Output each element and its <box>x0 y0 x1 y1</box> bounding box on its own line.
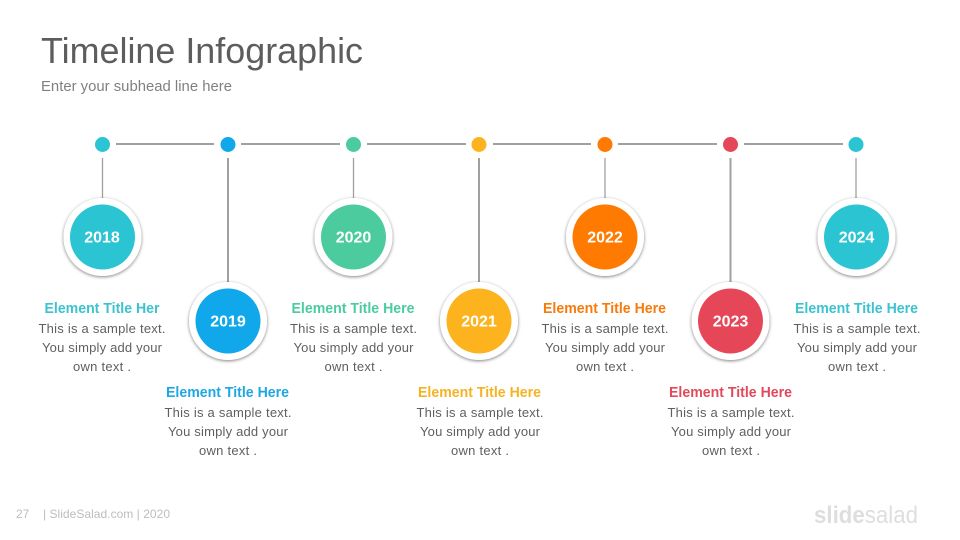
milestone 2021: This is a sample text. <box>416 405 544 420</box>
milestone 2022: You simply add your <box>545 340 666 355</box>
milestone 2023: 2023 <box>713 314 748 330</box>
milestone 2022: 2022 <box>587 230 623 246</box>
milestone 2019: 2019 <box>210 314 246 330</box>
milestone 2020: own text . <box>324 359 382 374</box>
milestone 2024 <box>794 137 920 374</box>
milestone 2020: 2020 <box>336 230 371 246</box>
milestone 2021: Element Title Here <box>418 384 541 401</box>
milestone 2018: This is a sample text. <box>38 321 166 336</box>
milestone 2022: This is a sample text. <box>542 321 668 336</box>
milestone 2024: You simply add your <box>797 340 918 355</box>
milestone 2024: Element Title Here <box>795 300 918 317</box>
milestone 2021 <box>416 137 544 458</box>
milestone 2022: own text . <box>576 359 634 374</box>
milestone 2019 <box>164 137 292 458</box>
footer page number: 27 <box>16 507 30 521</box>
timeline connector lines <box>116 143 843 145</box>
milestone 2021: You simply add your <box>420 424 541 439</box>
milestone 2019: Element Title Here <box>166 384 289 401</box>
milestone 2024: 2024 <box>839 230 874 246</box>
milestone 2020 <box>290 137 417 374</box>
milestone 2020: This is a sample text. <box>290 321 417 336</box>
milestone 2021: own text . <box>451 443 509 458</box>
milestone 2023: This is a sample text. <box>668 405 794 420</box>
milestone 2022 <box>542 137 668 374</box>
milestone 2023: You simply add your <box>671 424 792 439</box>
milestone 2019: own text . <box>199 443 257 458</box>
milestone 2020: Element Title Here <box>292 300 414 317</box>
milestone 2019: This is a sample text. <box>164 405 292 420</box>
milestone 2018: 2018 <box>84 230 120 246</box>
milestone 2022: Element Title Here <box>543 300 666 317</box>
footer source: | SlideSalad.com | 2020 <box>43 507 170 521</box>
milestone 2018: own text . <box>73 359 131 374</box>
milestone 2020: You simply add your <box>294 340 414 355</box>
milestone 2023: Element Title Here <box>669 384 792 401</box>
milestone 2024: own text . <box>828 359 886 374</box>
milestone 2023 <box>668 137 794 458</box>
milestone 2019: You simply add your <box>168 424 289 439</box>
milestone 2018: Element Title Her <box>44 300 160 317</box>
title: Timeline Infographic <box>41 30 363 71</box>
milestone 2018: You simply add your <box>42 340 163 355</box>
subhead: Enter your subhead line here <box>41 78 232 95</box>
logo wordmark: slidesalad <box>814 502 918 529</box>
milestone 2023: own text . <box>702 443 760 458</box>
milestone 2021: 2021 <box>461 314 497 330</box>
milestone 2024: This is a sample text. <box>794 321 920 336</box>
milestone 2018 <box>38 137 166 374</box>
